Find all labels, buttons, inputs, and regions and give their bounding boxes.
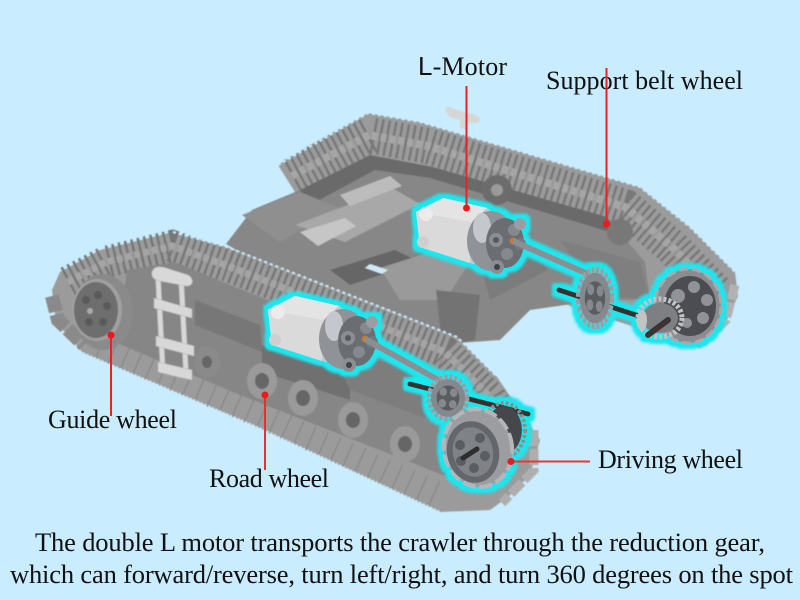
callout: Support belt wheel: Support belt wheel <box>546 66 743 95</box>
front drive assembly <box>268 296 528 493</box>
caption <box>10 527 794 589</box>
callout: Guide wheel <box>48 332 177 434</box>
small white beam <box>445 107 480 130</box>
front driving wheel <box>437 403 519 493</box>
rear motor axle <box>513 241 590 275</box>
callout: Driving wheel: Driving wheel <box>598 445 743 474</box>
caption: The double L motor transports the crawler through the reduction gear, <box>35 527 765 557</box>
callout: Driving wheel <box>508 445 743 474</box>
callout: L-Motor <box>418 51 507 212</box>
front crawler track <box>52 232 540 512</box>
rear bevel gear <box>637 299 682 337</box>
rear drive assembly <box>416 198 721 343</box>
callout: Guide wheel: Guide wheel <box>48 405 177 434</box>
callout: Road wheel <box>209 392 329 493</box>
rear driving wheel <box>655 269 721 343</box>
chassis <box>226 155 650 345</box>
front L-motor <box>268 296 378 372</box>
callout: L-Motor: L-Motor <box>418 51 507 81</box>
guide wheel <box>72 274 133 350</box>
front motor axle <box>365 339 442 382</box>
rear crawler track <box>278 113 738 348</box>
rear reduction gear <box>578 270 612 326</box>
road wheels <box>194 346 420 462</box>
caption: which can forward/reverse, turn left/right, and turn 360 degrees on the spot <box>10 559 794 589</box>
front side plate <box>117 262 470 478</box>
rear L-motor <box>416 198 526 274</box>
dark front axle <box>410 384 528 414</box>
callout: Support belt wheel <box>546 66 743 228</box>
callout: Road wheel: Road wheel <box>209 464 329 493</box>
dark rear axle <box>559 290 645 318</box>
crawler illustration <box>52 107 738 512</box>
front reduction gear <box>429 377 467 419</box>
front rear-facing gear <box>483 403 525 457</box>
white ladder <box>152 267 194 380</box>
